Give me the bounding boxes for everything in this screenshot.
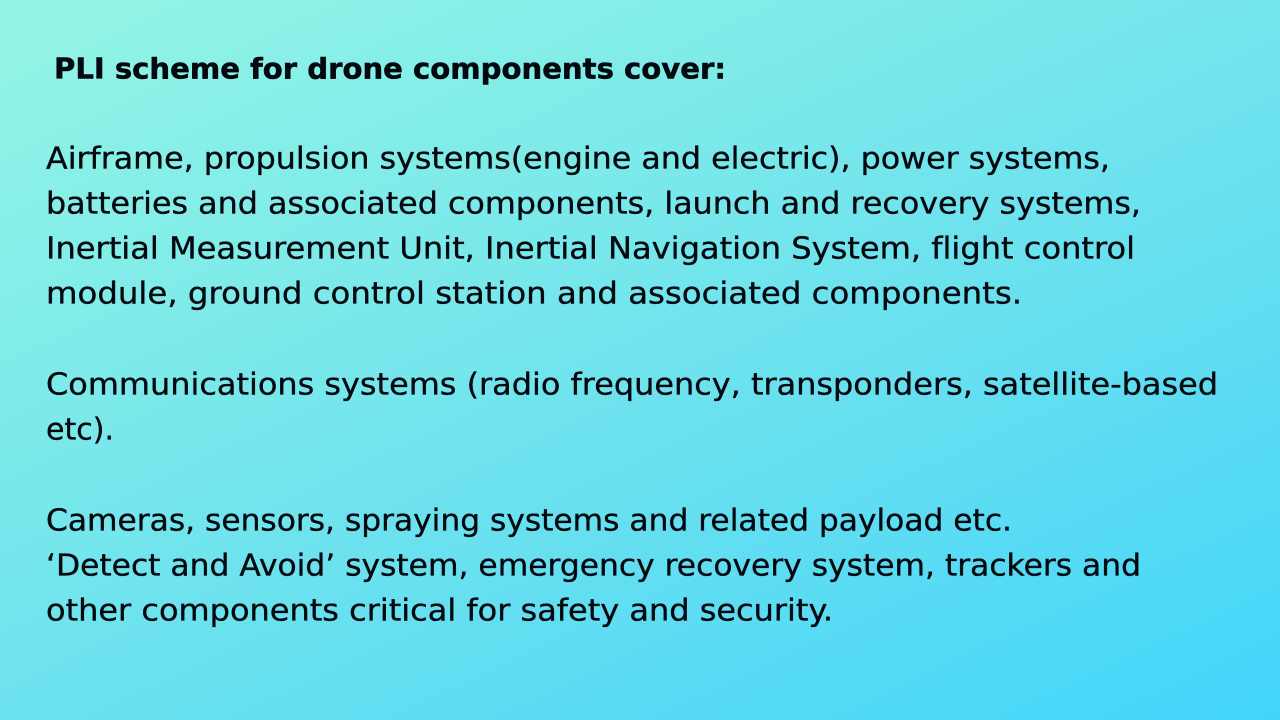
text block: payload and safety systems: Cameras, sensors, spraying systems and related payload etc.	[46, 504, 1012, 538]
text block: airframe and control components: batteries and associated components, launch and recovery systems,	[46, 186, 1141, 222]
text block: payload and safety systems	[46, 504, 1141, 628]
text block: communications systems: Communications systems (radio frequency, transponders, satellite-based	[46, 368, 1218, 402]
text block: airframe and control components: Inertial Measurement Unit, Inertial Navigation System, flight control	[46, 232, 1135, 266]
heading: PLI scheme for drone components cover:	[54, 52, 726, 86]
text block: payload and safety systems: other components critical for safety and security.	[46, 594, 833, 628]
text block: airframe and control components: Airframe, propulsion systems(engine and electric), power systems,	[46, 142, 1110, 176]
text block: airframe and control components	[46, 142, 1141, 312]
text block: payload and safety systems: ‘Detect and Avoid’ system, emergency recovery system, trackers and	[46, 548, 1141, 584]
text block: communications systems: etc).	[46, 412, 114, 448]
text block: communications systems	[46, 368, 1218, 448]
text block: airframe and control components: module, ground control station and associated components.	[46, 276, 1022, 312]
